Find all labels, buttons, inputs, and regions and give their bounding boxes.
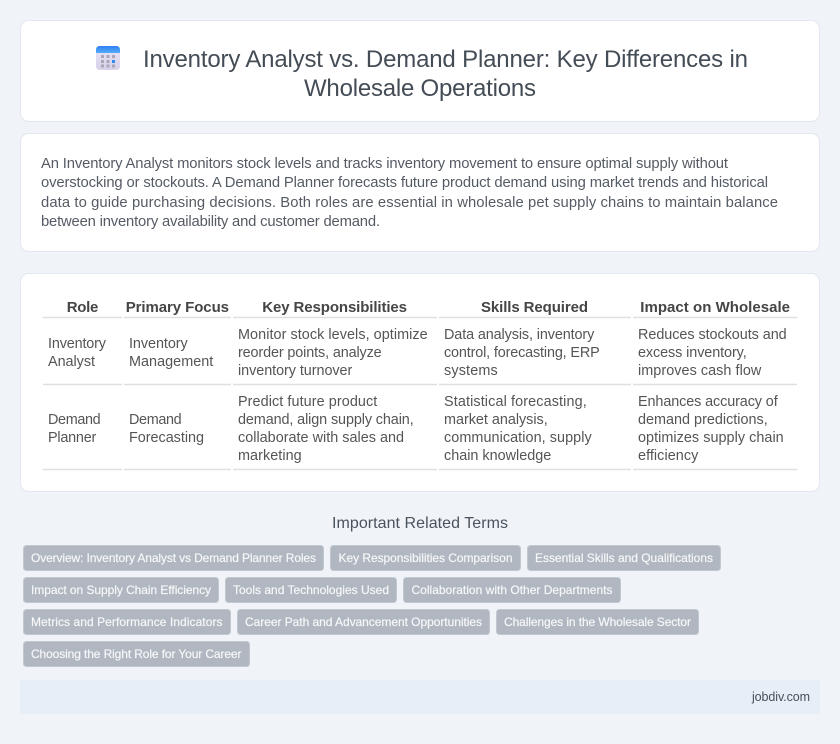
table row: Demand Planner: communication, supply bbox=[444, 430, 592, 446]
tag: Tools and Technologies Used bbox=[233, 583, 389, 597]
tag bbox=[404, 578, 620, 602]
tag bbox=[238, 610, 490, 634]
table row: Demand Planner: demand predictions, bbox=[638, 412, 768, 428]
tag bbox=[226, 578, 396, 602]
panel: comparison table bbox=[20, 274, 820, 492]
table header row: Primary Focus bbox=[126, 299, 229, 316]
tag: Essential Skills and Qualifications bbox=[535, 551, 713, 565]
table row: Inventory Analyst: Monitor stock levels, optimize bbox=[238, 327, 428, 343]
table row: Demand Planner: efficiency bbox=[638, 448, 699, 464]
text block: introduction: data to guide purchasing decisions. Both roles are essential in wholesale pet supply chains to maintain balance bbox=[41, 195, 778, 211]
table row: Demand Planner: Demand bbox=[129, 412, 182, 428]
tag: Collaboration with Other Departments bbox=[412, 583, 612, 597]
table row: Inventory Analyst: inventory turnover bbox=[238, 363, 353, 379]
text block: introduction bbox=[41, 156, 778, 230]
table row: Inventory Analyst: systems bbox=[444, 363, 498, 379]
tag: Choosing the Right Role for Your Career bbox=[31, 647, 242, 661]
table row: Demand Planner: demand, align supply chain, bbox=[238, 412, 414, 428]
table row: Demand Planner: Forecasting bbox=[129, 430, 204, 446]
table header row: Skills Required bbox=[481, 299, 588, 316]
panel: introduction bbox=[20, 134, 820, 252]
tag: Key Responsibilities Comparison bbox=[338, 551, 512, 565]
table row: Demand Planner: market analysis, bbox=[444, 412, 548, 428]
tag bbox=[24, 578, 218, 602]
text block: introduction: An Inventory Analyst monitors stock levels and tracks inventory movement to ensure optimal supply without bbox=[41, 156, 728, 172]
table header row bbox=[67, 299, 790, 316]
table row: Demand Planner: Predict future product bbox=[238, 394, 377, 410]
tag: Impact on Supply Chain Efficiency bbox=[31, 583, 211, 597]
table row: Inventory Analyst: improves cash flow bbox=[638, 363, 762, 379]
footer bar bbox=[20, 680, 820, 714]
table row: Inventory Analyst: excess inventory, bbox=[638, 345, 747, 361]
tag: Overview: Inventory Analyst vs Demand Planner Roles bbox=[31, 551, 316, 565]
table header row: Role bbox=[67, 299, 98, 316]
tag bbox=[528, 546, 720, 570]
tag: Career Path and Advancement Opportunities bbox=[245, 615, 482, 629]
table row: Inventory Analyst: control, forecasting, ERP bbox=[444, 345, 600, 361]
tag: Challenges in the Wholesale Sector bbox=[504, 615, 691, 629]
table header row: Impact on Wholesale bbox=[640, 299, 790, 316]
table row: Demand Planner: Demand bbox=[48, 412, 101, 428]
tag bbox=[24, 642, 250, 666]
table row: Demand Planner: optimizes supply chain bbox=[638, 430, 784, 446]
title: Wholesale Operations bbox=[304, 75, 536, 102]
panel: header bbox=[20, 20, 820, 122]
table row: Demand Planner: marketing bbox=[238, 448, 302, 464]
title: Inventory Analyst vs. Demand Planner: Key Differences in bbox=[143, 46, 748, 73]
table header row: Key Responsibilities bbox=[262, 299, 407, 316]
table row: Demand Planner: Enhances accuracy of bbox=[638, 394, 779, 410]
table row: Inventory Analyst: Inventory bbox=[129, 336, 188, 352]
related terms tags bbox=[24, 546, 720, 666]
table row: Inventory Analyst: reorder points, analyze bbox=[238, 345, 382, 361]
table row: Inventory Analyst: Management bbox=[129, 354, 213, 370]
heading: Important Related Terms: Important Related Terms bbox=[332, 515, 508, 532]
table row: Demand Planner: chain knowledge bbox=[444, 448, 551, 464]
table row: Demand Planner: Planner bbox=[48, 430, 97, 446]
tag bbox=[24, 546, 324, 570]
table row: Inventory Analyst: Analyst bbox=[48, 354, 95, 370]
text block: introduction: overstocking or stockouts. A Demand Planner forecasts future product demand using market trends and historical bbox=[41, 175, 768, 191]
table row: Inventory Analyst bbox=[48, 327, 787, 379]
tag bbox=[330, 546, 520, 570]
text block: introduction: between inventory availability and customer demand. bbox=[41, 214, 380, 230]
table row: Inventory Analyst: Data analysis, inventory bbox=[444, 327, 595, 343]
table row: Demand Planner: collaborate with sales and bbox=[238, 430, 404, 446]
tag bbox=[496, 610, 698, 634]
title bbox=[143, 46, 748, 102]
tag: Metrics and Performance Indicators bbox=[31, 615, 222, 629]
icon: calendar bbox=[96, 46, 120, 70]
table row: Demand Planner bbox=[48, 394, 784, 464]
tag bbox=[24, 610, 230, 634]
footer credit: jobdiv.com bbox=[751, 690, 810, 704]
table row: Demand Planner: Statistical forecasting, bbox=[444, 394, 587, 410]
table row: Inventory Analyst: Inventory bbox=[48, 336, 107, 352]
table row: Inventory Analyst: Reduces stockouts and bbox=[638, 327, 787, 343]
